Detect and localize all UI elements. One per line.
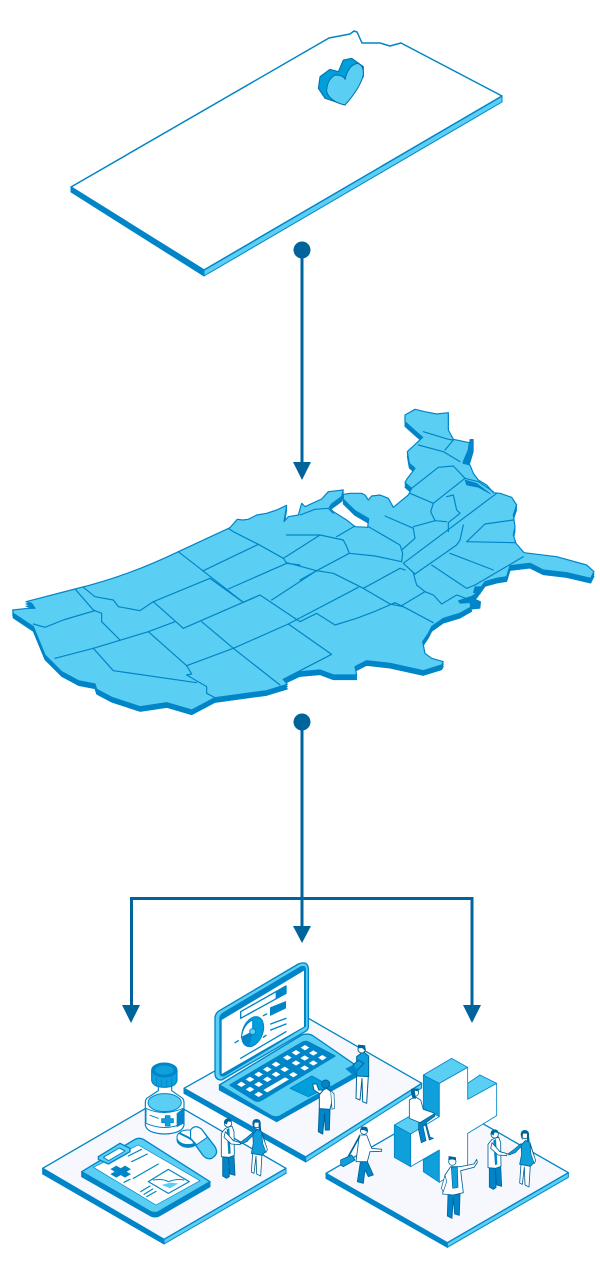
platform	[184, 1018, 422, 1162]
arrow: map splitting to three outputs	[122, 714, 481, 1023]
platform	[43, 1098, 286, 1244]
map extrusion	[13, 414, 594, 715]
person from behind	[313, 1080, 335, 1134]
person with tablet	[345, 1045, 369, 1103]
card top face	[71, 31, 502, 270]
clipboard text lines	[124, 1149, 158, 1197]
clipboard chart	[148, 1169, 189, 1193]
clipboard medical cross	[110, 1166, 131, 1178]
platform	[326, 1103, 568, 1247]
icon: large medical cross	[394, 1058, 497, 1182]
state borders west	[33, 528, 395, 698]
trackpad	[290, 1076, 330, 1097]
walking person with briefcase	[341, 1127, 382, 1183]
pills	[177, 1127, 217, 1159]
coastal accents	[458, 439, 491, 609]
map top face	[13, 409, 594, 710]
laptop base	[219, 1034, 362, 1122]
people shaking hands	[221, 1118, 267, 1178]
doctor gesturing	[441, 1156, 477, 1218]
card left edge	[71, 187, 204, 276]
pie chart	[238, 1013, 268, 1050]
arrow: card to map	[293, 242, 311, 480]
screen header bars	[241, 986, 286, 1018]
medicine bottle	[145, 1063, 184, 1134]
people shaking hands	[488, 1129, 536, 1189]
icon: heart	[318, 58, 363, 105]
panel: medical cross platform	[326, 1058, 568, 1247]
laptop screen	[215, 963, 308, 1080]
state borders east	[287, 432, 523, 623]
panel: medication and records platform	[43, 1063, 286, 1244]
keys	[237, 1045, 327, 1097]
panel: source document card with heart	[71, 31, 502, 276]
screen text lines	[235, 1014, 286, 1058]
map: United States	[13, 409, 594, 715]
card right edge	[204, 96, 502, 276]
panel: laptop platform	[184, 963, 422, 1162]
clipboard	[82, 1138, 210, 1217]
seated person	[409, 1089, 435, 1143]
keyboard	[230, 1041, 335, 1101]
